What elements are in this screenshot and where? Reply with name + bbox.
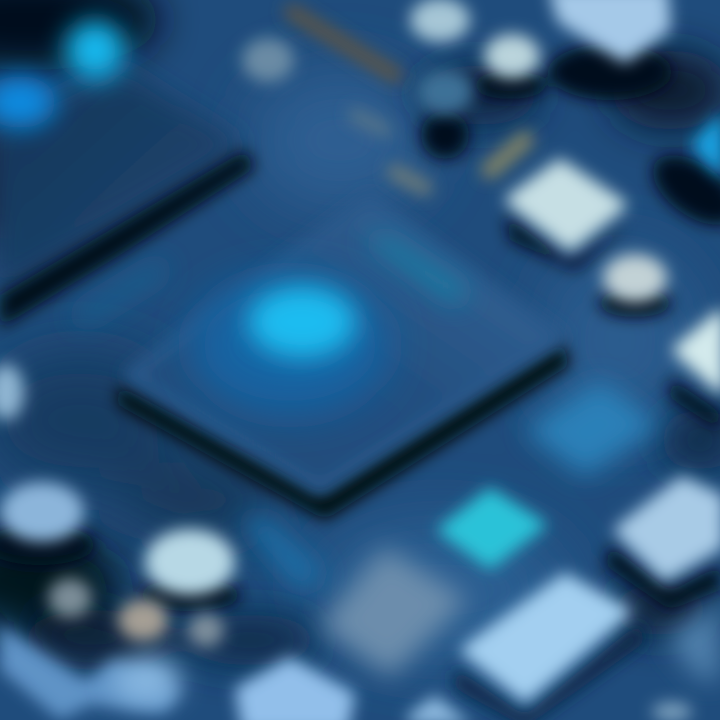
component: top chip <box>552 0 668 60</box>
central chip blue haze <box>190 275 390 415</box>
central chip shadow <box>118 342 570 520</box>
light components, top right <box>242 0 720 317</box>
component: cyan corner <box>695 118 720 172</box>
upper left chip <box>0 72 255 328</box>
cyan glows, upper left <box>0 20 125 128</box>
muted traces <box>292 12 525 188</box>
tile body <box>618 480 720 578</box>
chip shadow <box>0 150 255 328</box>
component: small domes <box>242 0 667 302</box>
pale domes <box>0 364 235 647</box>
bottom left highlight <box>113 656 181 704</box>
grey tile <box>325 552 462 672</box>
cyan tile <box>442 492 542 565</box>
bottom tiles <box>238 660 692 720</box>
long tile shadow <box>455 622 645 720</box>
central glow <box>248 286 356 358</box>
bottom left components <box>0 364 325 720</box>
right chip shadow <box>670 378 720 430</box>
long light tile <box>455 578 645 720</box>
tile shadow <box>605 545 720 610</box>
blue tile <box>530 385 655 472</box>
blue streak <box>240 515 325 590</box>
corner tile <box>665 600 720 680</box>
central chip <box>70 198 570 520</box>
long tile body <box>466 578 626 698</box>
chip body <box>0 72 235 285</box>
left streak <box>70 260 170 325</box>
small component shadows <box>0 525 240 611</box>
right edge chip <box>670 315 720 430</box>
right chip body <box>678 315 720 388</box>
background tonal patches <box>0 70 700 660</box>
component shadows <box>421 44 720 317</box>
teal streak <box>365 235 470 305</box>
component: pale chip <box>512 165 620 245</box>
central chip body <box>130 198 560 490</box>
lower left trace <box>0 625 180 720</box>
light tile right <box>605 480 720 610</box>
